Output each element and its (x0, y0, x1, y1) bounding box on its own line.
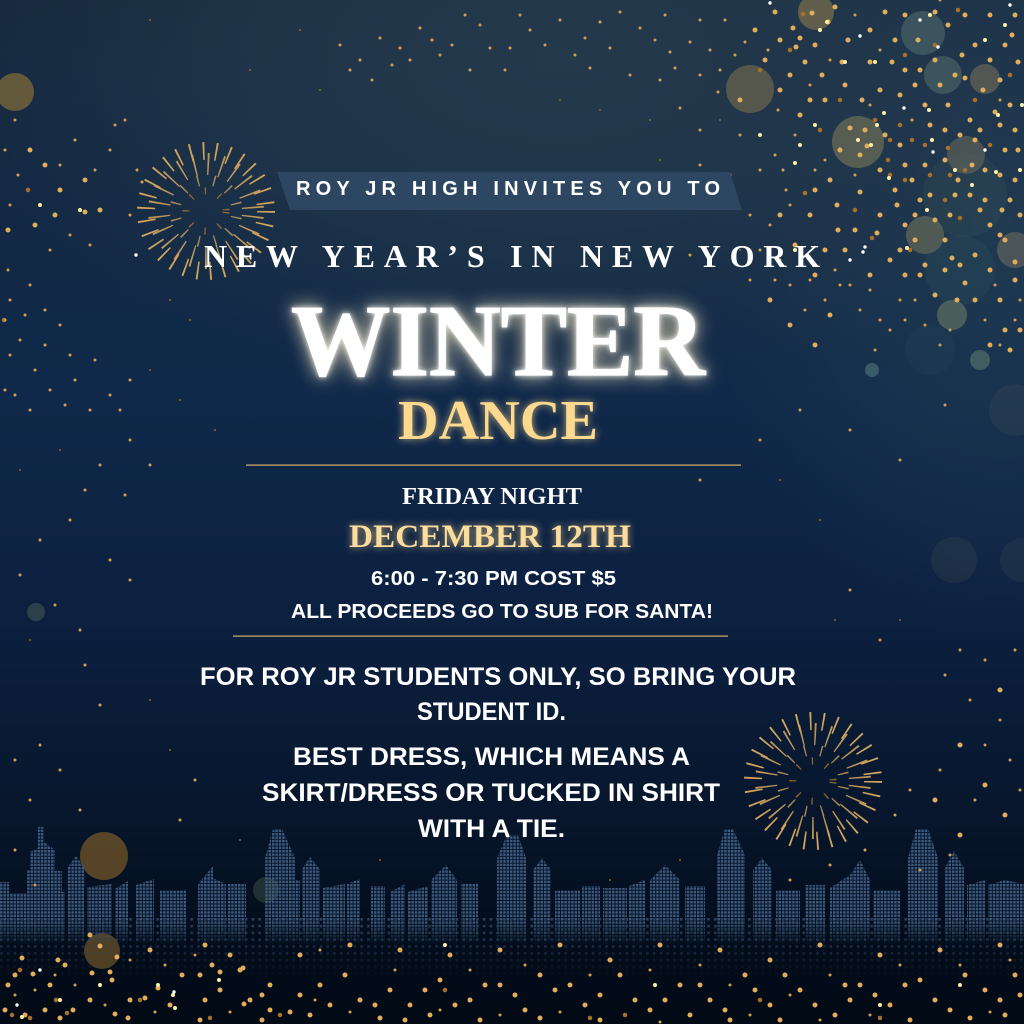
eligibility text: STUDENT ID. (417, 698, 566, 726)
divider (246, 464, 741, 466)
dress code text: BEST DRESS, WHICH MEANS A (293, 743, 690, 771)
firework: upper left (146, 151, 266, 271)
dress code text: WITH A TIE. (418, 815, 565, 843)
divider (233, 636, 728, 637)
day: FRIDAY NIGHT (402, 484, 582, 510)
dress code text (262, 743, 720, 843)
eligibility text (200, 663, 796, 726)
firework: lower right (753, 721, 873, 841)
banner: ROY JR HIGH INVITES YOU TO (296, 178, 720, 200)
eligibility text: FOR ROY JR STUDENTS ONLY, SO BRING YOUR (200, 663, 796, 691)
time and cost: 6:00 - 7:30 PM COST $5 (371, 568, 616, 590)
banner (277, 172, 742, 210)
title: dance: DANCE (398, 390, 598, 452)
dress code text: SKIRT/DRESS OR TUCKED IN SHIRT (262, 779, 720, 807)
proceeds note: ALL PROCEEDS GO TO SUB FOR SANTA! (291, 601, 713, 623)
date: DECEMBER 12TH (349, 519, 631, 555)
subtitle: NEW YEAR’S IN NEW YORK (204, 238, 820, 274)
title: winter: WINTER (291, 285, 706, 398)
city skyline (0, 827, 1024, 968)
